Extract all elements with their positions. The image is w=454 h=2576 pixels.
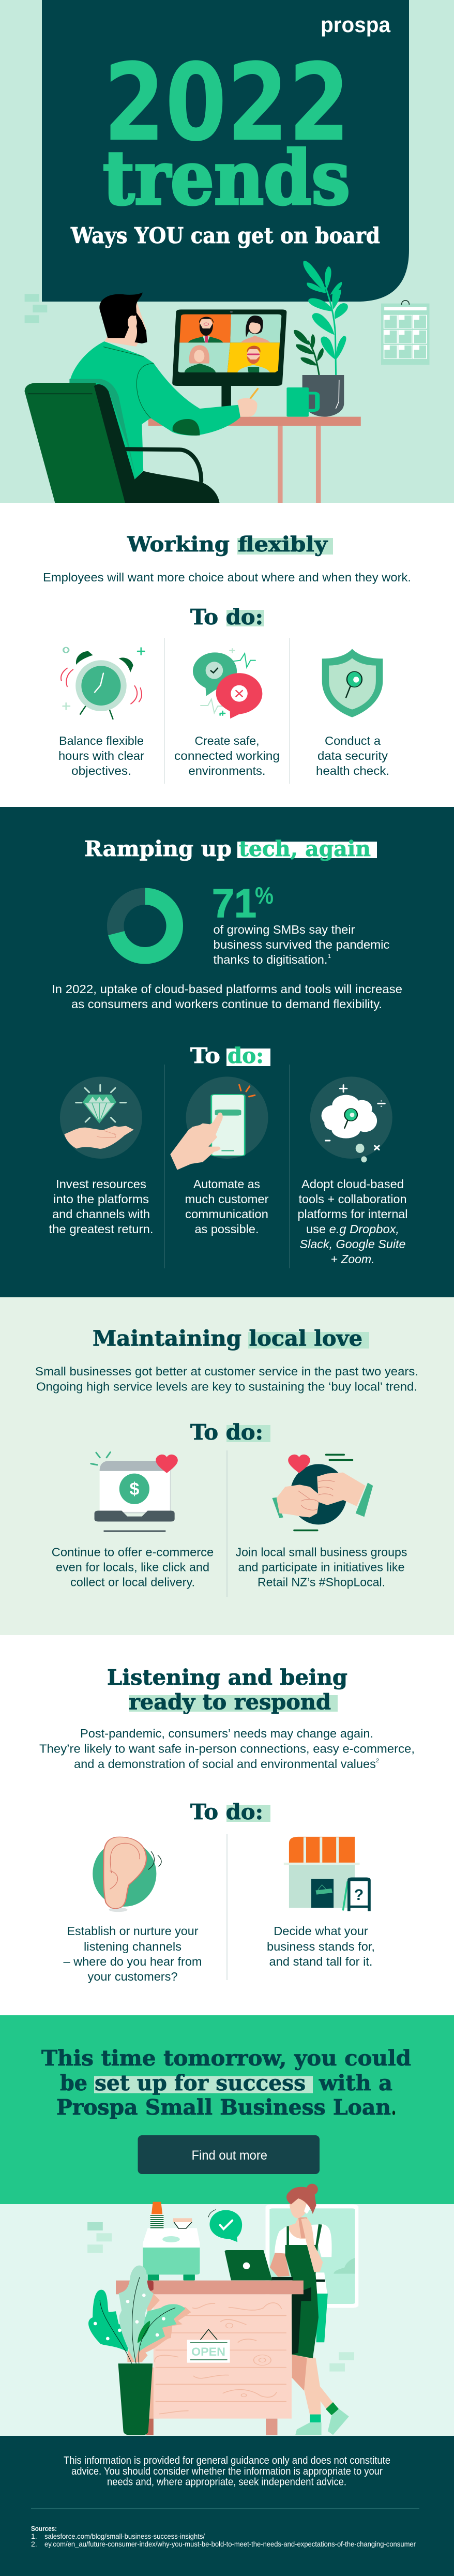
section background [0,2436,454,2576]
captions [52,1546,407,1589]
statistic: 71%: % [255,882,274,909]
headline: Prospa Small Business Loan [56,2095,391,2120]
icon: diamond in hand [60,1076,142,1159]
caption 3 [298,1177,407,1266]
button: Find out more [191,2148,267,2163]
man [69,292,257,480]
dividers [164,1065,290,1268]
decorative squares [87,2222,354,2372]
divider [226,1450,228,1597]
divider [226,1834,228,1980]
caption 1: into the platforms [53,1192,149,1206]
caption 2: and participate in initiatives like [238,1560,404,1574]
caption 2 [236,1546,407,1589]
panel: working flexibly [0,503,454,807]
to do highlight [226,1049,270,1066]
caption 1: Continue to offer e-commerce [52,1546,214,1559]
caption 2: Retail NZ’s #ShopLocal. [258,1576,385,1589]
headline: with a [319,2071,392,2095]
caption 1: – where do you hear from [63,1955,202,1968]
caption 2 [185,1177,269,1236]
intro text: and a demonstration of social and environmental values [74,1757,376,1771]
panel: hero [0,0,454,503]
caption 2: Decide what your [274,1924,368,1938]
caption 2: much customer [185,1192,269,1206]
heading: Working [127,532,230,557]
intro text: as consumers and workers continue to demand flexibility. [71,997,382,1011]
intro text [52,982,402,1011]
tile: man ginger hair [228,342,280,372]
shopkeeper [270,2184,332,2358]
intro text: They’re likely to want safe in-person connections, easy e-commerce, [39,1742,415,1756]
caption 3: tools + collaboration [299,1192,406,1206]
caption 3: platforms for internal [298,1207,407,1221]
caption 2: connected working [174,749,280,762]
caption 3: health check. [316,764,389,777]
caption 2: communication [185,1207,268,1221]
to do heading: do: [228,1043,264,1068]
caption 2: Join local small business groups [236,1546,407,1559]
intro text: Small businesses got better at customer service in the past two years. [35,1365,418,1378]
pencil [250,389,258,398]
statistic description: thanks to digitisation. [213,953,328,966]
icon: ear [93,1837,161,1912]
monitor stand [221,385,231,408]
sources: Sources: [31,2524,57,2533]
to do heading: To do: [190,605,263,630]
button [138,2135,320,2174]
icon: cloud with magnifier [310,1076,392,1162]
caption 1: Invest resources [56,1177,146,1191]
section background [0,1297,454,1635]
panel: footer [0,2436,454,2576]
caption 3: data security [317,749,388,762]
hair [99,292,143,338]
donut chart: 71% [115,896,175,955]
paper cups [150,2202,192,2228]
caption 3: use e.g Dropbox, [306,1222,399,1236]
heading: Maintaining [93,1326,241,1351]
icon: fist bump [272,1455,373,1530]
heading highlight [248,1332,369,1349]
caption 1: Balance flexible [59,734,144,747]
to do heading: To [190,1043,220,1068]
laptop [225,2250,293,2280]
caption 2: Automate as [193,1177,260,1191]
caption 1 [52,1546,214,1589]
panel: call to action [0,2015,454,2204]
caption 2: business stands for, [267,1940,375,1953]
tile: man with beard [179,314,231,342]
elbow patch [173,419,200,436]
plant: tall bright leaves [303,261,348,375]
icon: hand tapping phone [170,1076,268,1170]
caption 2 [267,1924,375,1968]
beard [134,312,147,343]
skin neck [104,300,146,347]
caption 1: the greatest return. [49,1222,153,1236]
heading [107,1665,347,1714]
disclaimer [64,2455,390,2488]
intro text [35,1365,418,1394]
speech bubble with tick [208,2210,242,2242]
heading: flexibly [238,532,328,557]
desk [148,417,361,503]
section background [0,807,454,1297]
heading highlight [237,538,333,555]
headline [41,2046,411,2120]
window [266,2205,358,2308]
statistic description [213,923,390,966]
statistic: 71%: 71 [212,880,256,926]
section background [0,2015,454,2204]
caption 2 [174,734,280,777]
caption 3: Adopt cloud-based [301,1177,404,1191]
sources: ey.com/en_au/future-consumer-index/why-you-must-be-bold-to-meet-the-needs-and-expectations-of-the-changing-consumer [44,2540,416,2548]
open sign [187,2329,230,2363]
title: trends: trends [103,134,350,221]
icon: storefront [284,1837,371,1911]
shopkeeper legs [292,2355,349,2435]
heading highlight [237,842,377,858]
counter [116,2281,304,2435]
heading [127,532,328,557]
disclaimer: This information is provided for general guidance only and does not constitute [64,2455,390,2466]
icon: alarm clock [61,648,144,719]
intro text: Employees will want more choice about where and when they work. [43,571,411,584]
caption 1 [49,1177,153,1236]
to do highlight [226,610,264,626]
headline: This time tomorrow, you could [41,2046,411,2071]
mug [286,387,317,417]
intro text [39,1727,415,1771]
plant pot [302,375,344,417]
captions [63,1924,375,1983]
heading highlight [129,1695,338,1712]
sources [31,2524,416,2548]
sources: salesforce.com/blog/small-business-success-insights/ [44,2532,205,2540]
heading: ready to respond [129,1689,331,1714]
caption 3: Conduct a [325,734,381,747]
to do heading: To do: [190,1420,263,1445]
icon: security shield [322,649,383,717]
statistic description: of growing SMBs say their [213,923,355,936]
monitor [172,309,286,386]
sources: 1. [31,2532,37,2540]
disclaimer: advice. You should consider whether the information is appropriate to your [71,2466,383,2477]
footer rule [31,2508,419,2509]
caption 1 [63,1924,202,1983]
to do highlight [226,1805,270,1822]
caption 1: your customers? [88,1970,178,1983]
captions [58,734,389,777]
panel: listening and responding [0,1635,454,2015]
plant: dark leaves [294,330,324,375]
panel: shop illustration [0,2184,454,2436]
video call tiles [178,314,281,372]
icon: wall calendar [381,301,429,365]
statistic description: 1 [328,953,331,960]
title: 2022: 2022 [103,40,350,165]
intro text: 2 [376,1758,379,1764]
to do highlight [226,1425,270,1442]
decorative squares [25,294,47,323]
caption 2: Create safe, [194,734,260,747]
heading: tech, again [239,836,371,861]
hero title panel [42,0,409,302]
intro text: Post-pandemic, consumers’ needs may change again. [80,1727,373,1740]
section background [0,2204,454,2436]
disclaimer: needs and, where appropriate, seek independent advice. [107,2477,346,2488]
caption 2: environments. [188,764,266,777]
headline: be [60,2071,87,2095]
coffee machine [143,2228,200,2281]
heading [84,836,371,861]
icon: online payment laptop [91,1452,178,1532]
to do heading [190,1043,264,1068]
intro text: Ongoing high service levels are key to sustaining the ‘buy local’ trend. [36,1380,417,1394]
headline highlight [94,2076,313,2093]
caption 1: and channels with [52,1207,150,1221]
captions [49,1177,407,1266]
heading: local love [249,1326,362,1351]
caption 2: as possible. [194,1222,259,1236]
section background [0,503,454,807]
caption 3 [316,734,389,777]
heading: Listening and being [107,1665,347,1690]
section background [0,1635,454,2015]
caption 1: listening channels [84,1940,181,1953]
caption 3: + Zoom. [331,1252,374,1266]
logo: prospa: prospa [321,12,391,37]
shirt [69,341,240,480]
dividers [164,638,290,784]
tile: woman blonde hair [178,342,230,372]
sources: 2. [31,2540,37,2548]
statistic description: business survived the pandemic [213,938,390,951]
heading: Ramping up [84,836,232,861]
caption 1: hours with clear [58,749,144,762]
potted plant [88,2266,191,2435]
headline: set up for success [95,2071,306,2095]
subtitle: Ways YOU can get on board [70,223,380,248]
office chair [25,379,219,503]
caption 2: and stand tall for it. [269,1955,372,1968]
to do heading: To do: [190,1800,263,1824]
caption 1: Establish or nurture your [67,1924,199,1938]
caption 3: Slack, Google Suite [300,1237,405,1251]
heading [93,1326,362,1351]
sign text: OPEN: OPEN [191,2345,225,2358]
caption 1: collect or local delivery. [70,1576,195,1589]
icon: question mark: ? [354,1886,364,1904]
panel: maintaining local love [0,1297,454,1635]
icon: dollar sign: $ [130,1479,140,1499]
caption 1: even for locals, like click and [56,1560,209,1574]
illustration: man on video call at desk [25,261,429,503]
hand [237,398,257,417]
illustration: shopkeeper at counter [87,2184,358,2435]
headline: . [391,2095,396,2120]
panel: ramping up tech [0,807,454,1297]
icon: chat bubbles [193,649,262,718]
caption 1 [58,734,144,777]
hero background [0,0,454,503]
caption 1: objectives. [71,764,131,777]
intro text: In 2022, uptake of cloud-based platforms and tools will increase [52,982,402,996]
tile: woman dark hair [230,314,281,342]
